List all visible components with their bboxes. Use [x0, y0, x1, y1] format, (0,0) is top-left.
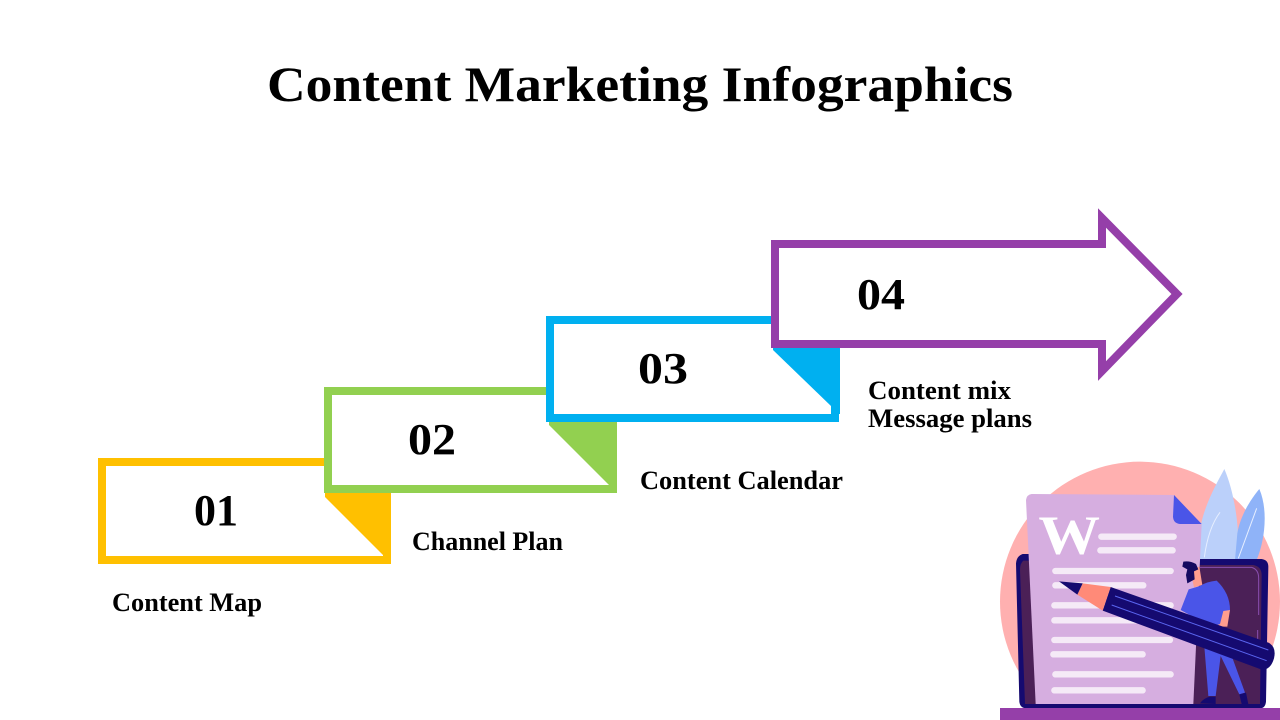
step 4 label: Content mix: [868, 376, 1011, 405]
step 1 label: Content Map: [112, 588, 262, 617]
title: Content Marketing Infographics: [267, 56, 1013, 112]
icon: leaves: [1200, 469, 1265, 560]
step 4: purple arrow: [775, 218, 1177, 371]
icon: pencil: [1059, 581, 1275, 669]
step 2: green box: [328, 391, 617, 493]
step 2 number: 02: [408, 415, 456, 464]
step 3 number: 03: [638, 344, 688, 393]
step 1 number: 01: [194, 486, 238, 535]
step 1: yellow box: [102, 462, 391, 564]
icon: laptop: [1016, 554, 1268, 708]
icon: document page: [1026, 494, 1202, 704]
illustration base bar: [1000, 708, 1280, 720]
step 3: blue box: [550, 320, 840, 418]
step 4 label: Message plans: [868, 404, 1032, 433]
step 4 number: 04: [857, 270, 905, 319]
step 3 label: Content Calendar: [640, 466, 843, 495]
step 2 label: Channel Plan: [412, 527, 564, 556]
icon: pink circle: [1000, 462, 1280, 720]
step 4 label: [868, 376, 1032, 433]
icon: person: [1181, 561, 1248, 704]
icon: document page: W: [1038, 504, 1100, 565]
illustration: document, laptop and writer with pencil: [1000, 462, 1280, 720]
